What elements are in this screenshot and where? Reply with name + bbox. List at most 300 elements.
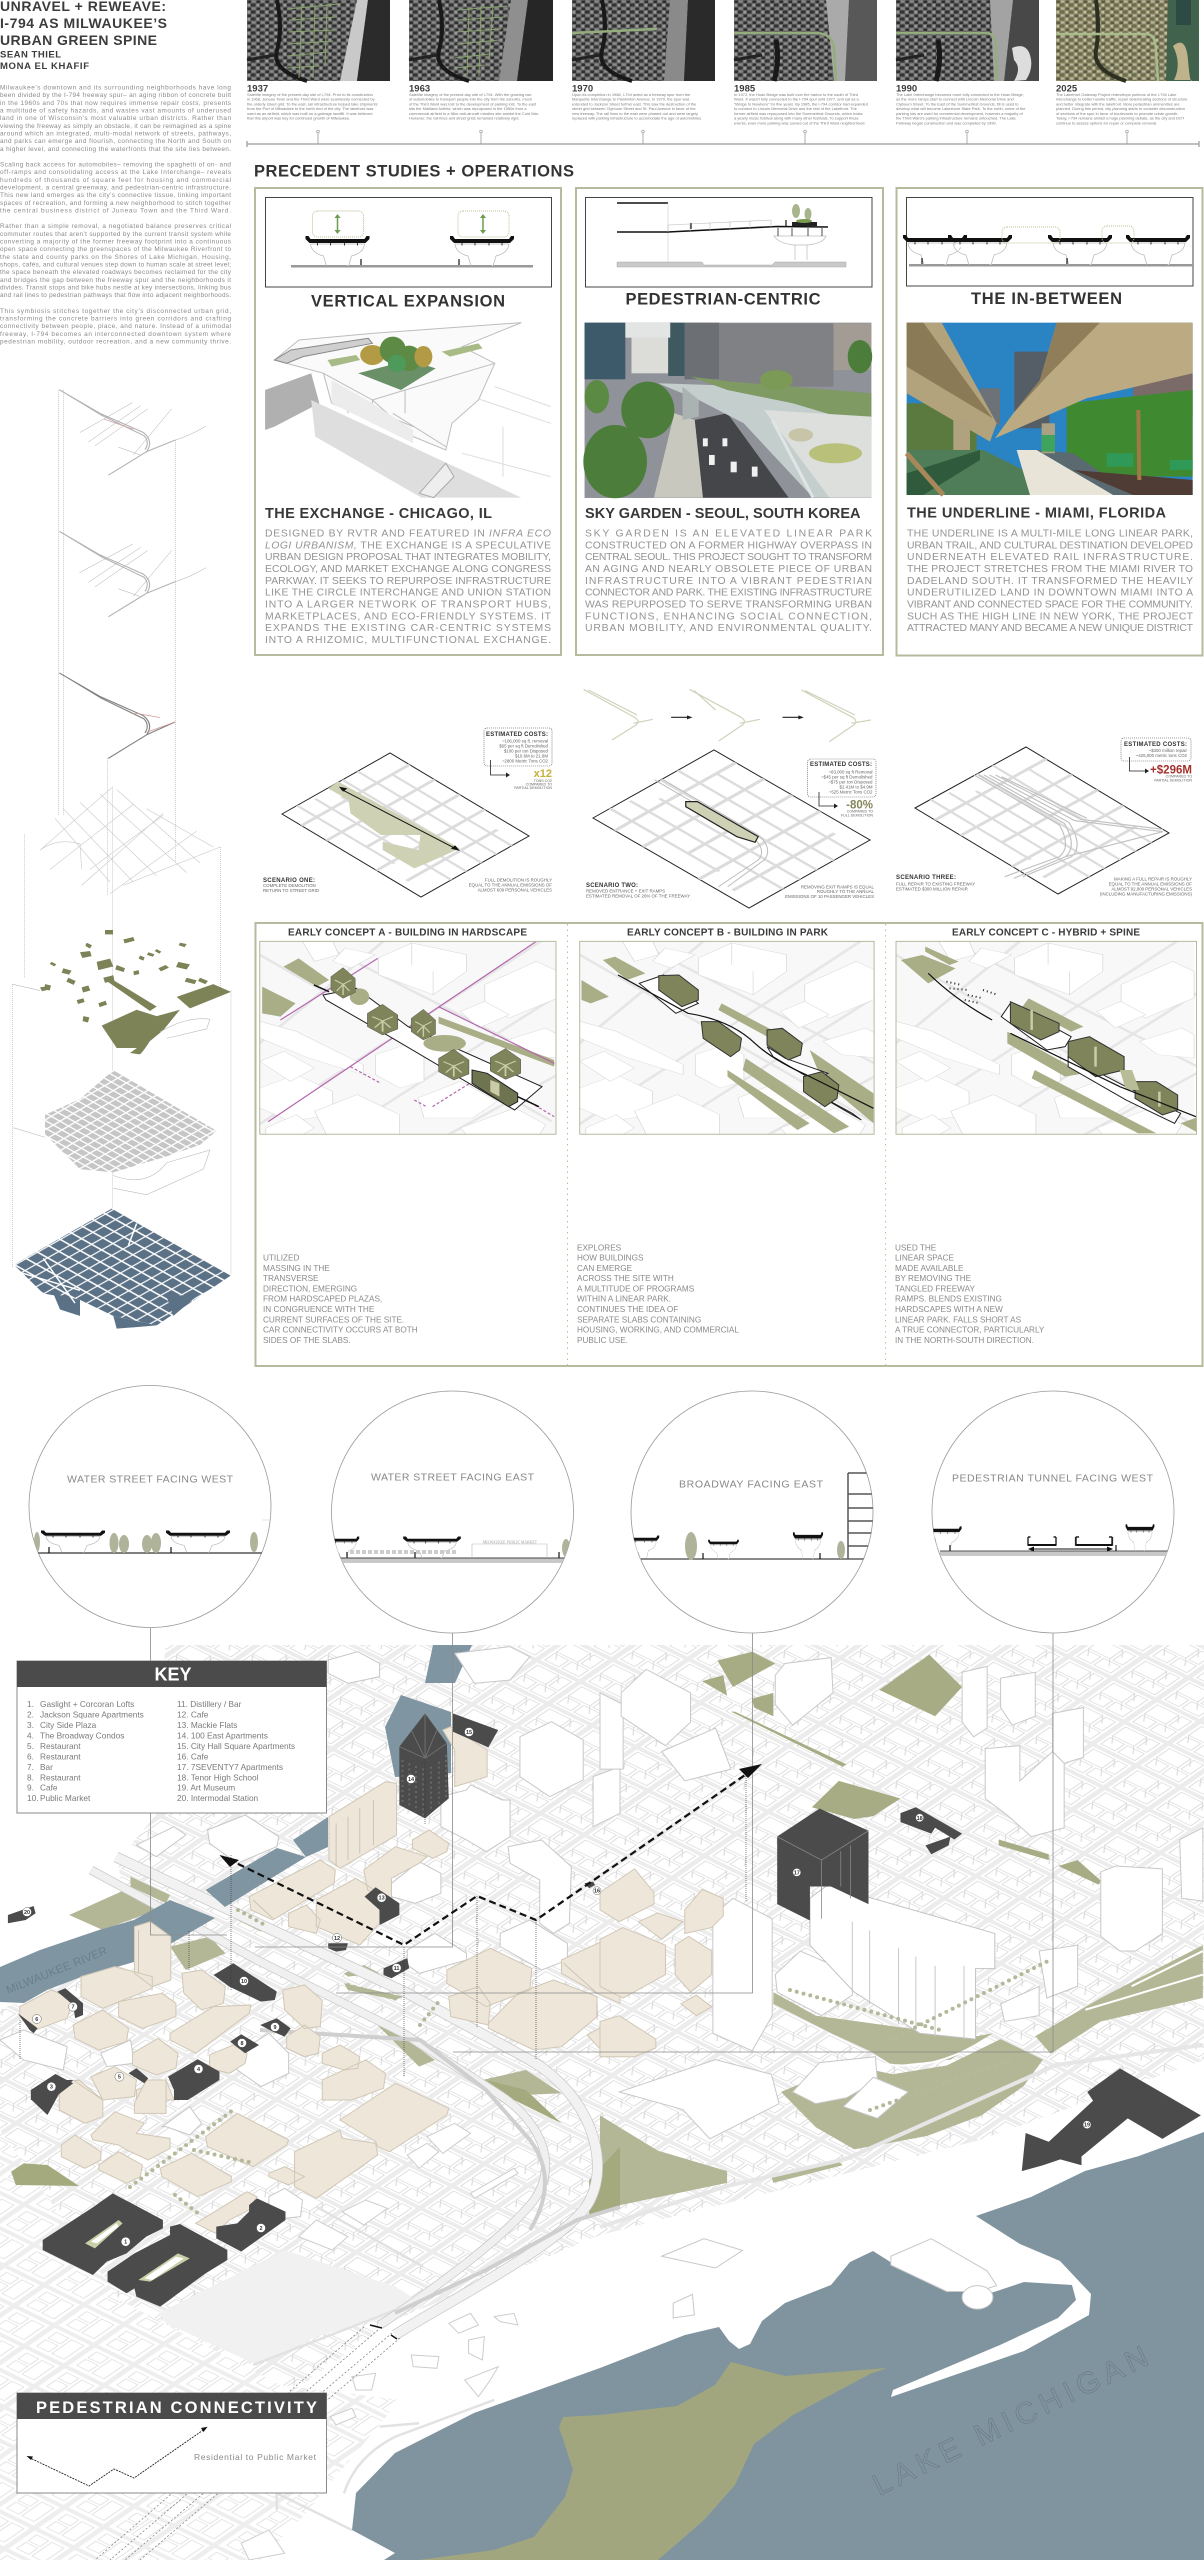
caption 2025: Interchange to better handle traffic, repair deteriorating sections of structure (1056, 97, 1188, 102)
scenario three map (915, 747, 1169, 894)
concept A text (263, 1254, 418, 1345)
project text: CONSTRUCTED ON A FORMER HIGHWAY OVERPASS IN (585, 540, 872, 551)
caption 1937: from the Port of Milwaukee to the north end of the city. The lakefront was (247, 106, 373, 111)
scenario one cost box: $65 per sq ft Demolished (499, 744, 549, 748)
map base (915, 747, 1169, 894)
operation title: THE IN-BETWEEN (971, 290, 1122, 308)
title block (0, 0, 167, 72)
dotted layer connectors (12, 390, 231, 1274)
intro text: off-ramps and consolidating access at the Lake Interchange– reveals (0, 169, 231, 176)
river label: MILWAUKEE RIVER (5, 1945, 109, 1997)
project text: ECOLOGY, AND MARKET EXCHANGE ALONG CONGRESS (265, 564, 551, 575)
street section (34, 1520, 272, 1553)
scenario two cost box (808, 759, 876, 818)
intro text: converting a majority of the former freeway footprint into a continuous (0, 238, 231, 246)
caption 1970: Marquette Interchange to Plankinton Avenue. In 1970, the spur was (572, 97, 690, 102)
scenario two cost box: ~525 Metric Tons CO2 (829, 789, 873, 794)
intro text: around which an integrated, multi-modal network of streets, pathways, (0, 130, 231, 138)
key list: 7. (27, 1762, 34, 1772)
intro text: and rail lines to pedestrian pathways that flow into adjacent neighborhoods. (0, 292, 231, 299)
scenario one text: EQUAL TO THE ANNUAL EMISSIONS OF (469, 882, 552, 888)
key list: 10. (27, 1793, 39, 1803)
legend header (17, 2393, 326, 2419)
concept A text: DIRECTION, EMERGING (263, 1284, 357, 1293)
concept titles: EARLY CONCEPT B - BUILDING IN PARK (627, 927, 829, 938)
intro text: Rather than a simple removal, a negotiated balance preserves critical (0, 223, 231, 230)
concept C text: TANGLED FREEWAY (895, 1284, 975, 1293)
section bubble: water street facing west (29, 1386, 272, 1628)
key list: 15. City Hall Square Apartments (177, 1741, 295, 1751)
operation title: PEDESTRIAN-CENTRIC (626, 291, 821, 309)
caption 1937 (247, 84, 378, 121)
scenario one cost box: PARTIAL DEMOLITION (514, 786, 552, 790)
concept B text: A MULTITUDE OF PROGRAMS (577, 1284, 695, 1293)
concept C (890, 938, 1200, 1138)
caption 1970: replaced with parking infrastructure to accomodate the age of automobiles. (572, 116, 702, 121)
title block: MONA EL KHAFIF (0, 61, 89, 72)
concept A text: UTILIZED (263, 1254, 299, 1263)
project text: PARKWAY. IT SEEKS TO REPURPOSE INFRASTRUCTURE (265, 576, 551, 587)
intro text: Scaling back access for automobiles– removing the spaghetti of on- and (0, 162, 231, 168)
key list: 20. Intermodal Station (177, 1793, 259, 1803)
rendering: the exchange (265, 323, 551, 498)
intro text: shops, cafés, and cultural venues step down to human scale at street level; (0, 262, 231, 268)
timeline captions (247, 84, 1188, 126)
scenario two cost box: ESTIMATED COSTS: (810, 762, 872, 768)
scenario one cost box: TONS CO2 (534, 779, 552, 783)
satellite 2025 (1056, 0, 1199, 81)
project text: THE PROJECT STRETCHES FROM THE MIAMI RIVER TO (907, 564, 1193, 575)
intro text: the central business district of Juneau Town and the Third Ward. (0, 208, 231, 214)
project text: INTO A RHIZOMIC, MULTIFUNCTIONAL EXCHANGE. (265, 635, 551, 646)
section bubble: water street facing east (321, 1391, 576, 1633)
bubble title: WATER STREET FACING WEST (67, 1474, 234, 1486)
scenario three text: ESTIMATED $300 MILLION REPAIR (896, 886, 968, 892)
key list: 6. (27, 1751, 34, 1761)
key list: Gaslight + Corcoran Lofts (40, 1699, 134, 1709)
green space layer (12, 930, 231, 1054)
caption 1970: Upon its completion in 1968, I-794 acted as a freeway spur from the (572, 92, 691, 97)
caption 1963: However, the rail lines and street grids remained relatively rigid. (409, 116, 520, 121)
intro text: and bridges the gap between the freeway spur and the neighborhoods it (0, 277, 231, 284)
scenario three cost box: ~$300 million repair (1149, 748, 1188, 753)
caption 1985 (734, 84, 868, 126)
caption 1990: Parkway began construction and was completed by 1999. (896, 120, 997, 126)
bubble title: BROADWAY FACING EAST (679, 1479, 824, 1491)
building number markers: 7 (71, 2005, 75, 2011)
section diagram: the in-between (903, 198, 1193, 286)
building number markers: 8 (240, 2041, 244, 2047)
intro text (0, 84, 232, 346)
concept C text: IN THE NORTH-SOUTH DIRECTION. (895, 1336, 1034, 1345)
key list: 1. (27, 1699, 34, 1709)
elevation drop lines (20, 1757, 746, 2076)
caption 1970: new freeway. The rail lines to the east were phased out and were largely (572, 111, 698, 116)
concept C text: BY REMOVING THE (895, 1274, 972, 1283)
tan buildings south (59, 2080, 449, 2233)
panel: vertical expansion (255, 188, 561, 655)
key list: Restaurant (40, 1741, 81, 1751)
intro text: spaces of recreation, and forming a new neighborhood to stitch together (0, 200, 232, 207)
caption 1985: former airfield was repurposed into the Summerfest Grounds, which hosts (734, 111, 862, 116)
caption 1985: to connect to Lincoln Memorial Drive and the rest of the Lakefront. The (734, 106, 858, 111)
concept B text: EXPLORES (577, 1244, 622, 1252)
building number markers: 6 (35, 2017, 38, 2023)
concept B text: CONTINUES THE IDEA OF (577, 1305, 678, 1314)
operation title: VERTICAL EXPANSION (311, 293, 505, 311)
scenario three cost box: ESTIMATED COSTS: (1124, 742, 1187, 748)
caption 1937: used as an airfield, which was built on a garbage landfill. It was believed (247, 111, 372, 116)
building layer (13, 1070, 217, 1195)
scenario one cost box: x12 (534, 768, 552, 780)
bubble title: WATER STREET FACING EAST (371, 1472, 535, 1484)
project text: AN AGING AND NEARLY OBSOLETE PIECE OF URBAN (585, 564, 872, 575)
bubble title: PEDESTRIAN TUNNEL FACING WEST (952, 1472, 1154, 1484)
key title: KEY (154, 1664, 192, 1684)
intro text: a multitude of safety hazards, and wastes vast amounts of underused (0, 108, 231, 114)
building number markers: 15 (466, 1730, 472, 1736)
project text: EXPANDS THE EXISTING CAR-CENTRIC SYSTEMS (265, 623, 551, 634)
freeway layer two (59, 531, 206, 617)
white context buildings east (600, 1658, 1203, 2318)
large apartment block (810, 1885, 995, 2039)
lower park patches (69, 1877, 561, 2097)
white context buildings west (0, 1647, 620, 2087)
concept C text: LINEAR SPACE (895, 1254, 955, 1263)
scenario two map (593, 750, 870, 908)
intro text: freeway, I-794 becomes an interconnected downtown system where (0, 331, 231, 338)
caption 2025: of sections of the spur in favor of boulevards to promote urban growth. (1056, 111, 1178, 116)
project title: THE UNDERLINE - MIAMI, FLORIDA (907, 506, 1167, 522)
satellite 1937 (247, 0, 390, 81)
caption 1990: Clybourn Street. To the East of the Summerfest Grounds, fill is used to (896, 102, 1019, 106)
concept C text: A TRUE CONNECTOR, PARTICULARLY (895, 1326, 1045, 1334)
caption 1990: develop what will become Lakeshore State Park. To the north, some of the (896, 106, 1026, 111)
highlighted dark buildings south (31, 2080, 285, 2307)
caption 1990 (896, 84, 1026, 126)
caption 1970 (572, 84, 702, 121)
project text: UNDERUTILIZED LAND IN DOWNTOWN MIAMI INTO A (907, 588, 1193, 599)
scenario one text (263, 878, 552, 893)
scenario one text: RETURN TO STREET GRID (263, 888, 319, 893)
intro text: a higher level, and connecting the waterfronts that the site lies between. (0, 146, 231, 153)
scenario three cost box (1121, 738, 1192, 782)
legend label: Residential to Public Market (194, 2452, 317, 2462)
map base (282, 753, 529, 897)
caption 1963 (409, 84, 539, 121)
scenario one cost box: $10.6M to 21.8M (515, 754, 548, 758)
scenario two cost box: -80% (846, 800, 873, 812)
satellite 1970 (572, 0, 715, 81)
scenario one cost box: ESTIMATED COSTS: (486, 732, 548, 738)
panel: the in-between (896, 188, 1202, 656)
project text: LIKE THE CIRCLE INTERCHANGE AND UNION STATION (265, 588, 551, 599)
exploded axonometric layers (12, 390, 231, 1329)
scenario two text: REMOVING EXIT RAMPS IS EQUAL (801, 884, 875, 890)
tan buildings east (600, 1869, 723, 2057)
tan buildings west (20, 1727, 620, 2100)
scenario two cost box: COMPARED TO (847, 810, 873, 814)
highlighted dark buildings east (777, 1807, 1201, 2171)
freeway ramps (91, 1857, 1203, 2560)
scenario one cost box: ~106,000 sq ft. removal (502, 738, 548, 744)
panel: pedestrian-centric (576, 188, 883, 655)
scenario one cost box: $100 per ton Disposed (504, 748, 549, 754)
concept C text: USED THE (895, 1244, 937, 1252)
site section leader lines (150, 1628, 1053, 2052)
building number markers: 18 (917, 1816, 923, 1822)
project text: MARKETPLACES, AND ECO-FRIENDLY SYSTEMS. IT (265, 611, 552, 622)
scenario three text: EQUAL TO THE ANNUAL EMISSIONS OF (1109, 882, 1192, 886)
panel: early concepts (254, 923, 1203, 1366)
intro text: and parks can emerge and flourish, connecting the North and South on (0, 138, 231, 145)
scenario three text: SCENARIO THREE: (896, 875, 956, 881)
project text: LOGI URBANISM, THE EXCHANGE IS A SPECULATIVE (265, 540, 551, 551)
intro text: the state and county parks on the Shores of Lake Michigan. Housing, (0, 254, 231, 261)
concept A text: MASSING IN THE (263, 1264, 330, 1273)
caption 2025: Today, I-794 remains amidst a huge planning debate, as the city and DOT (1056, 116, 1185, 121)
building number markers: 1 (124, 2240, 127, 2246)
scenario two cost box: ~$75 per ton Disposed (828, 780, 873, 784)
intro text: development, a central greenway, and pedestrian-centric infrastructure. (0, 184, 231, 192)
intro text: This symbiosis stitches together the city’s disconnected urban grid, (0, 308, 231, 315)
key list: 11. Distillery / Bar (177, 1699, 242, 1709)
section bubble: broadway facing east (621, 1391, 873, 1633)
scenario two cost box: ~$45 per sq ft Demolished (821, 774, 873, 780)
scenario one cost box (484, 728, 552, 790)
key list: 8. (27, 1772, 34, 1782)
project text: CONNECTOR AND PARK. THE EXISTING INFRASTRUCTURE (585, 588, 872, 599)
key list: Public Market (40, 1793, 91, 1803)
scenario one map (282, 753, 529, 897)
concept A text: CURRENT SURFACES OF THE SITE. (263, 1315, 404, 1324)
concept A text: SIDES OF THE SLABS. (263, 1336, 351, 1345)
street section (926, 1524, 1168, 1556)
caption 2025: 2025 (1056, 84, 1078, 94)
key list (27, 1699, 295, 1803)
caption 1963: sits the Maitland Airfield, which was repurposed in the 1950s from a (409, 106, 527, 111)
caption 1963: of automobiles to transport people into the city from the suburbs, much (409, 97, 532, 102)
demolition footprint (328, 782, 460, 868)
concept B text: SEPARATE SLABS CONTAINING (577, 1315, 701, 1324)
upper park patches (600, 1652, 1203, 2209)
scenario three text: MAKING A FULL REPAIR IS ROUGHLY (1114, 876, 1192, 882)
project text: DESIGNED BY RVTR AND FEATURED IN INFRA ECO (265, 528, 551, 540)
legend route (26, 2427, 208, 2486)
concept B text: WITHIN A LINEAR PARK. (577, 1295, 671, 1304)
key list: 2. (27, 1709, 34, 1719)
scenario three text: ALMOST 92,000 PERSONAL VEHICLES (1111, 886, 1192, 892)
building number markers: 12 (334, 1936, 340, 1942)
freeway layer three (59, 673, 175, 758)
pedestrian route (220, 1764, 762, 1945)
key list: 9. (27, 1783, 34, 1793)
key list: 3. (27, 1720, 34, 1730)
intro text: been divided by the I-794 freeway spur– an aging ribbon of concrete built (0, 92, 231, 99)
concept C text (895, 1244, 1045, 1345)
concept A text: CAR CONNECTIVITY OCCURS AT BOTH (263, 1326, 418, 1334)
caption 1985: events, even more parking was carved out of the Third Ward neighborhood. (734, 120, 866, 126)
concept B text: CAN EMERGE (577, 1264, 633, 1273)
scenario three cost box: PARTIAL DEMOLITION (1154, 778, 1192, 782)
project text: INTO A LARGER NETWORK OF TRANSPORT HUBS, (265, 600, 551, 610)
caption 2025 (1056, 84, 1188, 126)
timeline axis (247, 130, 1199, 147)
building number markers: 16 (594, 1889, 600, 1895)
project text: SKY GARDEN IS AN ELEVATED LINEAR PARK (585, 528, 872, 540)
concept C text: RAMPS. BLENDS EXISTING (895, 1295, 1002, 1304)
concept B text: HOW BUILDINGS (577, 1254, 644, 1263)
caption 1970: street grid between Clybourn Street and St. Paul Avenue in favor of the (572, 106, 696, 111)
project text: INFRASTRUCTURE INTO A VIBRANT PEDESTRIAN (585, 576, 872, 587)
scenario three text (896, 875, 1193, 896)
key list: Bar (40, 1762, 53, 1772)
caption 2025: planned. During this period, city planning starts to consider deconstruction (1056, 106, 1185, 111)
lake label: LAKE MICHIGAN (868, 2340, 1154, 2502)
scenario two cost box: FULL DEMOLITION (841, 814, 873, 818)
key list: Jackson Square Apartments (40, 1709, 144, 1719)
scenario one cost box: ~2800 Metric Tons CO2 (502, 758, 549, 764)
caption 1963: of the Third Ward was lost to the development of parking lots. To the east (409, 102, 537, 106)
project text (585, 528, 872, 634)
street section (321, 1537, 576, 1563)
intro text: viewing the freeway as simply an obstacle, it can be reimagined as a spine (0, 123, 231, 130)
caption 1990: parking lots are used for commercial development, however a majority of (896, 111, 1024, 116)
scenario two text: SCENARIO TWO: (586, 883, 638, 889)
project text: WAS REPURPOSED TO SERVE TRANSFORMING URBAN (585, 600, 872, 610)
precedent heading: PRECEDENT STUDIES + OPERATIONS (254, 163, 574, 181)
scenario freeway sequence (584, 689, 871, 742)
street section (621, 1473, 873, 1560)
caption 1937: Satellite imagery of the present-day site of I-794. Prior to its construction (247, 92, 373, 97)
caption 1963: Satellite imagery of the present-day site of I-794. With the growing use (409, 92, 532, 97)
freeway layer one (59, 390, 206, 475)
project text: ATTRACTED MANY AND BECAME A NEW UNIQUE DISTRICT (907, 623, 1194, 634)
lakeshore park (419, 2362, 887, 2560)
project text: DADELAND SOUTH. IT TRANSFORMED THE HEAVILY (907, 576, 1193, 587)
caption 2025: continue to assess options for repair or complete removal. (1056, 120, 1157, 126)
project text: FUNCTIONS, ENHANCING SOCIAL CONNECTION, (585, 611, 872, 622)
key header (17, 1661, 326, 1687)
project text: SUCH AS THE HIGH LINE IN NEW YORK, THE PROJECT (907, 611, 1194, 622)
caption 1970: extended to Jackson Street further east. This saw the destruction of the (572, 102, 697, 106)
caption 1937: that this airport was key for continued growth of Milwaukee. (247, 116, 350, 121)
key list: Cafe (40, 1783, 58, 1793)
project text: CENTRAL SEOUL. THIS PROJECT SOUGHT TO TRANSFORM (585, 552, 872, 563)
title block: I-794 AS MILWAUKEE’S (0, 15, 167, 31)
key list: 13. Mackie Flats (177, 1720, 237, 1730)
project text: THE UNDERLINE IS A MULTI-MILE LONG LINEAR PARK, (907, 528, 1193, 540)
removed ramps footprint (655, 778, 768, 887)
building number markers: 9 (273, 2025, 277, 2031)
caption 1963: commercial airfield to a Nike anti-aircraft missiles site amidst the Cold War. (409, 111, 539, 116)
concept B (574, 938, 884, 1138)
concept B text (577, 1244, 739, 1345)
caption 1985: 1985 (734, 84, 756, 94)
key list: Restaurant (40, 1772, 81, 1782)
concept B text: ACROSS THE SITE WITH (577, 1274, 674, 1283)
street grid layer (40, 788, 220, 894)
intro text: pedestrian mobility, outdoor recreation, and a new community thrive. (0, 338, 231, 346)
caption 1963: 1963 (409, 84, 430, 94)
scenario two text (586, 883, 875, 899)
key list: 14. 100 East Apartments (177, 1730, 268, 1740)
southern wood (11, 2080, 620, 2217)
lake michigan water (352, 2132, 1204, 2560)
caption 1985: "Bridge to Nowhere" for five years. By 1985, the I-794 corridor had expanded (734, 102, 868, 106)
concept C text: MADE AVAILABLE (895, 1264, 964, 1273)
satellite 1963 (409, 0, 553, 81)
project text (907, 528, 1194, 634)
lakefront white land (300, 2070, 1204, 2520)
scenario one text: FULL DEMOLITION IS ROUGHLY (485, 878, 552, 882)
project text (265, 528, 552, 646)
street grid (0, 1645, 1204, 2400)
concept C text: HARDSCAPES WITH A NEW (895, 1305, 1003, 1314)
building number markers: 4 (197, 2067, 201, 2073)
scenario two cost box: $2.41M to $4.9M (840, 784, 873, 789)
scenario one text: SCENARIO ONE: (263, 878, 315, 884)
caption 1990: 1990 (896, 84, 917, 94)
project text: URBAN DESIGN PROPOSAL THAT INTEGRATES MOBILITY, (265, 552, 551, 563)
scenario one text: COMPLETE DEMOLITION (263, 883, 316, 888)
section diagram: pedestrian-centric (586, 198, 872, 287)
project text: URBAN TRAIL, AND CULTURAL DESTINATION DEVELOPED (907, 540, 1193, 551)
ground plane layer (14, 1209, 231, 1329)
map base (593, 750, 870, 908)
title block: SEAN THIEL (0, 50, 61, 60)
building number markers: 17 (794, 1870, 800, 1876)
project title: SKY GARDEN - SEOUL, SOUTH KOREA (585, 506, 861, 522)
concept A text: TRANSVERSE (263, 1274, 319, 1283)
key list: 16. Cafe (177, 1751, 209, 1761)
key list: 4. (27, 1730, 34, 1740)
intro text: Milwaukee’s downtown and its surrounding neighborhoods have long (0, 84, 231, 92)
caption 1937: the orderly street grid. To the east, rail infrastructure helped take shipments (247, 102, 378, 106)
building number markers: 19 (1084, 2123, 1090, 2129)
photo: sky garden (583, 323, 872, 498)
scenario one cost box: COMPARED TO (526, 782, 552, 786)
section bubble: pedestrian tunnel facing west (926, 1391, 1174, 1633)
concept A (254, 938, 564, 1138)
intro text: divides. Transit stops and bike hubs nestle at key intersections, linking bus (0, 284, 231, 292)
building number markers: 2 (259, 2226, 263, 2232)
project title: THE EXCHANGE - CHICAGO, IL (265, 506, 492, 522)
scenario one text: ALMOST 609 PERSONAL VEHICLES (478, 888, 552, 892)
caption 1990: The Lake Interchange becomes more fully connected to the Hoan Bridge, (896, 92, 1024, 97)
intro text: hundreds of thousands of square feet for housing and commercial (0, 177, 231, 184)
highlighted dark buildings west (8, 1713, 595, 2100)
pedestrian connectivity legend (17, 2393, 326, 2493)
milwaukee river (0, 1645, 472, 2003)
caption 1985: In 1972, the Hoan Bridge was built over the harbor to the south of Third (734, 92, 858, 97)
scenario two text: EMISSIONS OF 10 PASSENGER VEHICLES (785, 894, 874, 899)
caption 1970: 1970 (572, 84, 593, 94)
building number markers: 10 (241, 1979, 247, 1985)
building number markers: 5 (118, 2075, 121, 2081)
intro text: open space connecting the greenspaces of the Milwaukee Riverfront to (0, 246, 231, 253)
caption 2025: The Lakefront Gateway Project redevelops portions of the I-794 Lake (1056, 92, 1177, 97)
building number markers: 14 (408, 1777, 415, 1783)
caption 1985: Ward. It wasn't fully connected to the I-794 spur until 1977, and sat as a (734, 97, 860, 102)
concept C text: LINEAR PARK. FALLS SHORT AS (895, 1315, 1022, 1324)
key list: 12. Cafe (177, 1709, 209, 1719)
scenario two cost box: ~83,000 sq ft Removal (828, 770, 873, 774)
intro text: commuter routes that aren’t supported by the current transit system while (0, 231, 231, 238)
tree rows (130, 1910, 1050, 2215)
isometric site map (0, 1628, 1204, 2560)
section diagram: vertical expansion (266, 198, 552, 287)
